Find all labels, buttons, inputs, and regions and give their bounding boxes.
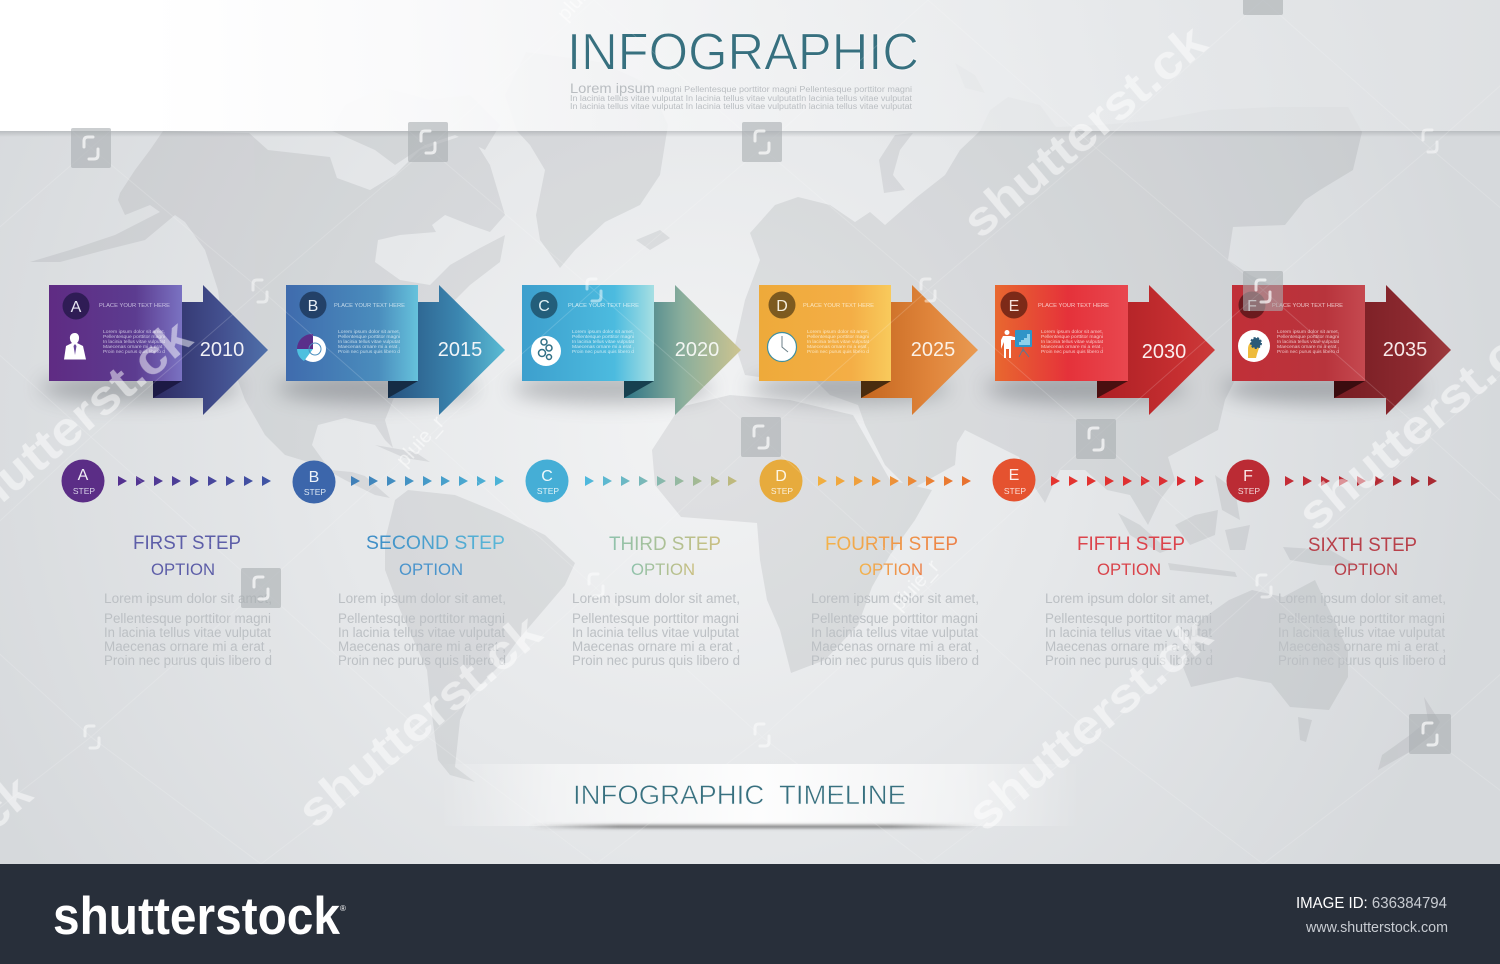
column: fourth step: Maecenas ornare mi a erat , — [811, 639, 979, 654]
timeline step badge C: C — [541, 468, 553, 485]
column: second step — [338, 533, 506, 668]
timeline step badge F — [1226, 460, 1270, 502]
panel: step F: 2035 — [1383, 339, 1427, 361]
panel: step F: Maecenas ornare mi a erat , — [1277, 344, 1339, 350]
panel: step B: B — [308, 298, 318, 315]
header band — [0, 0, 1500, 137]
timeline step badge C: STEP — [537, 486, 559, 496]
panel: step B: Pellentesque porttitor magni — [338, 334, 400, 340]
column: fourth step: OPTION — [859, 560, 923, 579]
column: fifth step: Lorem ipsum dolor sit amet, — [1045, 591, 1213, 606]
panel: step B: Maecenas ornare mi a erat , — [338, 344, 400, 350]
panel: step E: PLACE YOUR TEXT HERE — [1038, 303, 1109, 309]
panel: step E: 2030 — [1142, 341, 1186, 363]
column: fifth step: Pellentesque porttitor magni — [1045, 611, 1212, 626]
panel: step B: 2015 — [438, 339, 482, 361]
subtitle: In lacinia tellus vitae vulputat In lacinia tellus vitae vulputatIn lacinia tellus vitae vulputat — [570, 94, 913, 103]
australia — [1183, 580, 1348, 710]
panel: step D: In lacinia tellus vitae vulputat — [807, 339, 870, 345]
timeline arrows C — [585, 476, 737, 486]
panel: step F: Proin nec purus quis libero d — [1277, 349, 1339, 355]
timeline step badge D: D — [775, 468, 787, 485]
footer bar — [0, 864, 1500, 964]
column: first step: Lorem ipsum dolor sit amet, — [104, 591, 272, 606]
column: second step: In lacinia tellus vitae vulputat — [338, 625, 505, 640]
panel: step D: PLACE YOUR TEXT HERE — [803, 303, 874, 309]
column: third step: Proin nec purus quis libero d — [572, 653, 740, 668]
column: second step: OPTION — [399, 560, 463, 579]
column: sixth step: In lacinia tellus vitae vulputat — [1278, 625, 1445, 640]
watermark: pluie_r: pluie_r — [887, 556, 944, 615]
panel: step E: In lacinia tellus vitae vulputat — [1041, 339, 1104, 345]
timeline arrows F — [1285, 476, 1437, 486]
panel: step D: 2025 — [911, 339, 955, 361]
south america — [385, 490, 575, 782]
column: second step: Pellentesque porttitor magni — [338, 611, 505, 626]
column: fourth step: FOURTH STEP — [825, 534, 958, 555]
panel: step D: Lorem ipsum dolor sit amet, — [807, 329, 869, 335]
column: third step: In lacinia tellus vitae vulputat — [572, 625, 739, 640]
icon: person — [64, 333, 86, 360]
column: fourth step: Lorem ipsum dolor sit amet, — [811, 591, 979, 606]
column: first step: FIRST STEP — [133, 533, 241, 554]
column: second step: Lorem ipsum dolor sit amet, — [338, 591, 506, 606]
panel: step F: In lacinia tellus vitae vulputat — [1277, 339, 1340, 345]
panel: step A: In lacinia tellus vitae vulputat — [103, 339, 166, 345]
panel: step A — [40, 285, 268, 415]
title: INFOGRAPHIC — [567, 22, 919, 80]
watermark: pluie_r — [392, 0, 944, 615]
timeline step badge E — [992, 458, 1036, 502]
watermark: pluie_r: pluie_r — [392, 412, 449, 471]
ribbon title: INFOGRAPHIC TIMELINE — [573, 780, 906, 810]
icon: pie chart — [297, 334, 326, 362]
africa — [652, 395, 932, 673]
panel: step B: Proin nec purus quis libero d — [338, 349, 400, 355]
footer logo: shutterstock — [53, 887, 340, 946]
column: second step: Proin nec purus quis libero d — [338, 653, 506, 668]
panel: step E: Pellentesque porttitor magni — [1041, 334, 1103, 340]
panel: step E: Proin nec purus quis libero d — [1041, 349, 1103, 355]
panel: step C: Pellentesque porttitor magni — [572, 334, 634, 340]
column: first step — [104, 533, 272, 668]
watermarks: shutterst.ck — [958, 608, 1222, 841]
timeline arrows E — [1051, 476, 1204, 486]
panel: step C: 2020 — [675, 339, 719, 361]
column: fourth step: Proin nec purus quis libero d — [811, 653, 979, 668]
column: fourth step: Pellentesque porttitor magni — [811, 611, 978, 626]
column: fifth step: Proin nec purus quis libero d — [1045, 653, 1213, 668]
column: sixth step: Lorem ipsum dolor sit amet, — [1278, 591, 1446, 606]
column: first step: Maecenas ornare mi a erat , — [104, 639, 272, 654]
column: first step: Pellentesque porttitor magni — [104, 611, 271, 626]
timeline step badge F: F — [1243, 468, 1253, 485]
timeline arrows D — [818, 476, 971, 486]
column: third step: THIRD STEP — [609, 534, 721, 555]
timeline step badge D: STEP — [771, 486, 793, 496]
column: third step: Maecenas ornare mi a erat , — [572, 639, 740, 654]
timeline step badge A: A — [78, 467, 89, 484]
panel: step F: PLACE YOUR TEXT HERE — [1272, 303, 1343, 309]
footer site url: www.shutterstock.com — [1305, 919, 1448, 936]
panel: step C: C — [538, 298, 550, 315]
watermarks: shutterst.ck — [288, 605, 552, 838]
panel: step C: Proin nec purus quis libero d — [572, 349, 634, 355]
timeline arrows B — [351, 476, 504, 486]
timeline step badge A — [62, 460, 104, 502]
column: sixth step: Pellentesque porttitor magni — [1278, 611, 1445, 626]
panel: step C: PLACE YOUR TEXT HERE — [568, 303, 639, 309]
greenland — [505, 52, 668, 268]
column: third step: OPTION — [631, 560, 695, 579]
column: sixth step — [1278, 535, 1446, 668]
eurasia — [735, 97, 1362, 525]
panel: step A: Pellentesque porttitor magni — [103, 334, 165, 340]
timeline step badge B: STEP — [304, 487, 326, 497]
column: sixth step: Proin nec purus quis libero d — [1278, 653, 1446, 668]
panel: step A: PLACE YOUR TEXT HERE — [99, 303, 170, 309]
timeline step badge C — [526, 460, 568, 502]
timeline arrows A — [118, 476, 271, 486]
panel: step D: Pellentesque porttitor magni — [807, 334, 869, 340]
panel: step C: In lacinia tellus vitae vulputat — [572, 339, 635, 345]
panel: step B — [276, 285, 505, 415]
islands — [375, 63, 1440, 770]
world map — [30, 52, 1440, 782]
column: first step: In lacinia tellus vitae vulputat — [104, 625, 271, 640]
panel: step D: Maecenas ornare mi a erat , — [807, 344, 869, 350]
panel: step E: E — [1009, 298, 1019, 315]
panel: step F: Pellentesque porttitor magni — [1277, 334, 1339, 340]
watermarks: shutterst.ck — [953, 15, 1217, 248]
panel: step F: F — [1247, 298, 1257, 315]
icon: presenter with chart — [1001, 330, 1032, 358]
canadian arctic — [330, 88, 500, 165]
column: sixth step: OPTION — [1334, 560, 1398, 579]
panel: step B: In lacinia tellus vitae vulputat — [338, 339, 401, 345]
timeline step badge E: E — [1009, 467, 1019, 484]
panel: step C — [512, 285, 741, 415]
panel: step B: Lorem ipsum dolor sit amet, — [338, 329, 400, 335]
watermark squares — [71, 0, 1451, 754]
column: third step: Pellentesque porttitor magni — [572, 611, 739, 626]
panel: step F: Lorem ipsum dolor sit amet, — [1277, 329, 1339, 335]
timeline step badge B — [292, 460, 336, 504]
panel: step E: Maecenas ornare mi a erat , — [1041, 344, 1103, 350]
north america — [30, 131, 505, 498]
panel: step C: Lorem ipsum dolor sit amet, — [572, 329, 634, 335]
panel: step A: Maecenas ornare mi a erat , — [103, 344, 165, 350]
column: third step — [572, 534, 740, 668]
panel: step A: 2010 — [200, 339, 244, 361]
column: first step: Proin nec purus quis libero d — [104, 653, 272, 668]
timeline step badge E: STEP — [1004, 486, 1026, 496]
icon: hexagon network — [531, 336, 561, 366]
timeline step badge A: STEP — [73, 486, 95, 496]
timeline step badge D — [760, 460, 802, 502]
column: second step: SECOND STEP — [366, 533, 505, 554]
icon: head with gear — [1238, 330, 1270, 362]
panel: step A: Lorem ipsum dolor sit amet, — [103, 329, 165, 335]
subtitle: Lorem ipsum — [570, 81, 655, 96]
column: third step: Lorem ipsum dolor sit amet, — [572, 591, 740, 606]
column: fifth step: FIFTH STEP — [1077, 534, 1185, 555]
panel: step A: A — [71, 299, 82, 316]
panel: step D — [749, 285, 978, 415]
panel: step D: Proin nec purus quis libero d — [807, 349, 869, 355]
panel: step F — [1222, 285, 1451, 415]
column: fifth step — [1045, 534, 1213, 668]
panel: step E: Lorem ipsum dolor sit amet, — [1041, 329, 1103, 335]
panel: step D: D — [776, 298, 788, 315]
column: fifth step: OPTION — [1097, 560, 1161, 579]
timeline step badge F: STEP — [1238, 486, 1260, 496]
column: fifth step: In lacinia tellus vitae vulputat — [1045, 625, 1212, 640]
column: sixth step: Maecenas ornare mi a erat , — [1278, 639, 1446, 654]
footer image id: IMAGE ID: 636384794 — [1296, 895, 1447, 912]
column: sixth step: SIXTH STEP — [1308, 535, 1417, 556]
column: second step: Maecenas ornare mi a erat , — [338, 639, 506, 654]
icon: clock — [768, 332, 796, 362]
footer registered mark: ® — [340, 904, 346, 913]
panel: step C: Maecenas ornare mi a erat , — [572, 344, 634, 350]
panel: step B: PLACE YOUR TEXT HERE — [334, 303, 405, 309]
panel: step E — [985, 285, 1215, 415]
subtitle — [570, 81, 913, 111]
column: fourth step — [811, 534, 979, 668]
column: fourth step: In lacinia tellus vitae vulputat — [811, 625, 978, 640]
column: first step: OPTION — [151, 560, 215, 579]
panel: step A: Proin nec purus quis libero d — [103, 349, 165, 355]
column: fifth step: Maecenas ornare mi a erat , — [1045, 639, 1213, 654]
subtitle: magni Pellentesque porttitor magni Pellentesque porttitor magni — [657, 85, 912, 94]
bottom ribbon — [440, 764, 1080, 828]
timeline step badge B: B — [309, 469, 319, 486]
subtitle: In lacinia tellus vitae vulputat In lacinia tellus vitae vulputatIn lacinia tellus vitae vulputat — [570, 102, 913, 111]
